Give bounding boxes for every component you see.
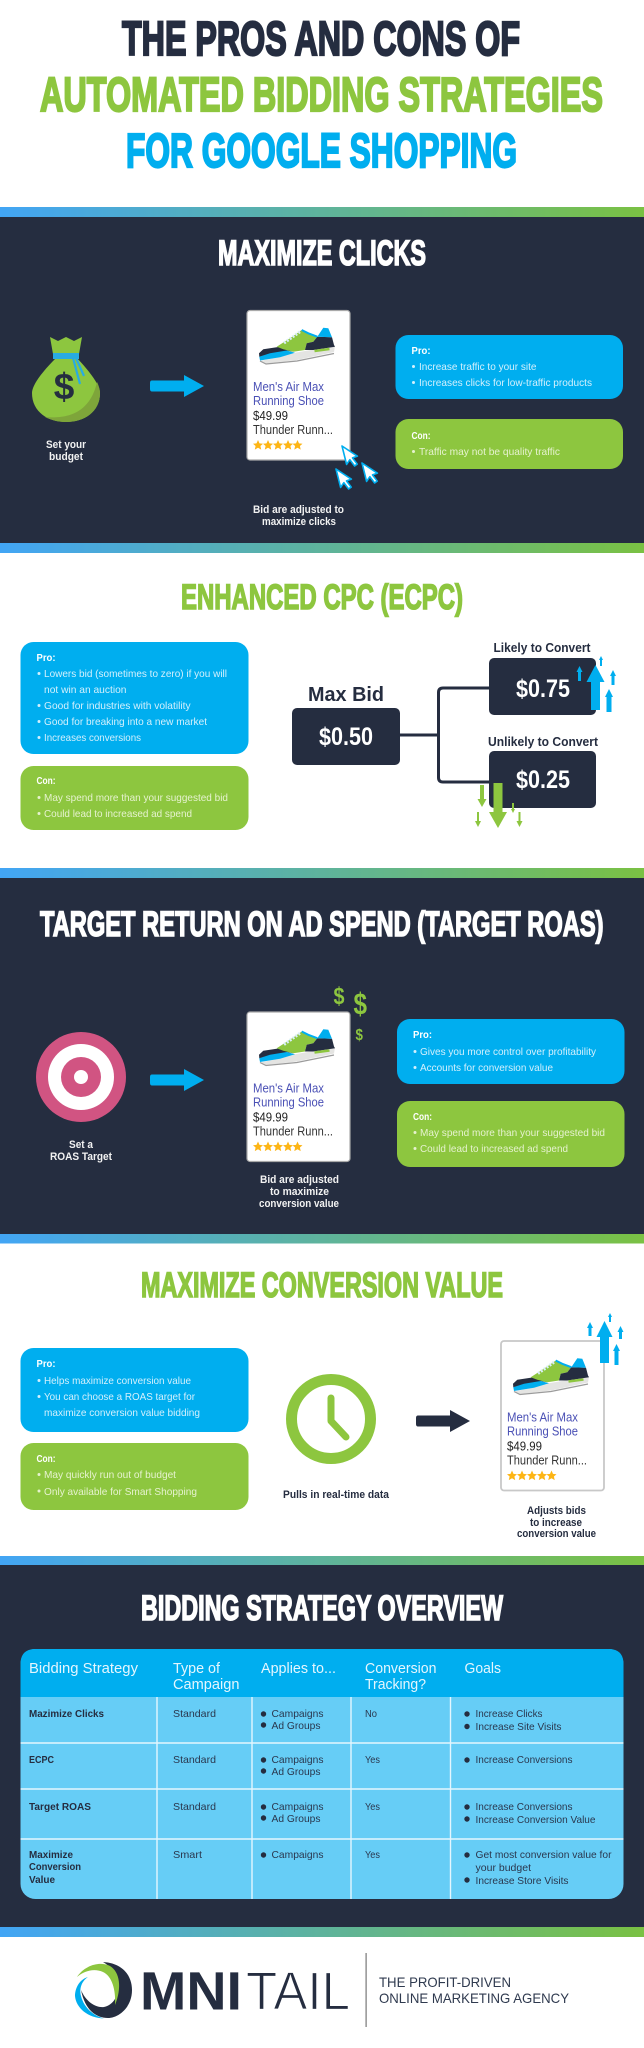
pro box: Pro: [412,345,430,357]
heading: maximize clicks: MAXIMIZE CLICKS [218,234,426,273]
product card: Men's Air Max [253,380,325,394]
caption: bids adjusted: conversion value [259,1198,339,1210]
table header: Campaign [173,1676,240,1693]
heading: enhanced cpc: ENHANCED CPC (ECPC) [181,578,463,617]
product card [247,310,350,460]
pro box: Helps maximize conversion value [44,1375,191,1387]
con box: Con: [36,775,56,787]
gradient band [0,543,644,553]
caption: adjusts bids: conversion value [517,1528,596,1540]
pro box [397,1019,624,1084]
pro box: Lowers bid (sometimes to zero) if you will [44,668,227,680]
row: maximize clicks: Increase Clicks [476,1708,542,1720]
wordmark [140,1962,350,2022]
row: maximize conversion value: your budget [476,1862,531,1874]
caption: set a roas target: ROAS Target [50,1151,112,1163]
con box: Traffic may not be quality traffic [419,446,560,458]
gradient band [0,207,644,217]
table header [29,1660,501,1693]
pro box: Gives you more control over profitability [420,1046,597,1058]
pro box: Good for breaking into a new market [44,716,207,728]
caption: bids adjusted [259,1174,339,1210]
caption: bids adjusted [253,504,344,528]
row: maximize conversion value: Smart [173,1849,202,1861]
row: ecpc: Increase Conversions [476,1754,572,1766]
row: target roas: Increase Conversions [476,1801,572,1813]
table header: Bidding Strategy [29,1660,138,1677]
box: unlikely value [489,751,596,808]
caption: bids adjusted: maximize clicks [262,516,336,528]
caption: set your budget [46,439,87,463]
panel: target roas [0,878,644,1234]
table [20,1649,624,1899]
caption: bids adjusted: to maximize [270,1186,329,1198]
row: ecpc: Standard [173,1754,216,1766]
row: maximize conversion value: Value [29,1874,55,1886]
row: maximize clicks: Increase Site Visits [476,1721,562,1733]
label: likely to convert: Likely to Convert [494,641,591,655]
box: likely value: $0.75 [516,675,570,703]
gradient band [0,1234,644,1244]
wordmark: TAIL [246,1962,350,2022]
wordmark: MNI [140,1962,242,2022]
row: ecpc: Yes [365,1754,380,1766]
box: unlikely value: $0.25 [516,766,570,794]
box: max bid value [292,708,400,765]
icon: up arrows [576,656,616,712]
product card: Men's Air Max [253,1082,325,1096]
gradient band [0,868,644,878]
row: maximize clicks: Ad Groups [272,1720,320,1732]
caption: pulls in real-time data: Pulls in real-time data [283,1489,390,1501]
pro box: Increases conversions [44,732,141,744]
icon: down arrows [475,783,522,828]
pro box: not win an auction [44,684,127,696]
pro box: Increases clicks for low-traffic products [419,377,592,389]
icon: dollar signs: $ [354,986,367,1021]
con box: May quickly run out of budget [44,1469,176,1481]
row: maximize conversion value: Yes [365,1849,380,1861]
row: maximize clicks [29,1708,562,1733]
icon: dollar signs: $ [334,983,345,1010]
panel: enhanced cpc [20,578,616,830]
pro box: Increase traffic to your site [419,361,537,373]
con box: May spend more than your suggested bid [420,1127,605,1139]
box: likely value [489,658,596,715]
con box: Con: [413,1111,432,1123]
icon: money bag: $ [54,366,75,407]
icon: up arrows [587,1313,624,1365]
product card [501,1341,604,1490]
logo: omnitail [75,1953,570,2027]
row: maximize clicks: Campaigns [272,1708,324,1720]
con box: Could lead to increased ad spend [44,808,192,820]
row: target roas [29,1801,596,1826]
con box: May spend more than your suggested bid [44,792,228,804]
row: maximize conversion value: Maximize [29,1849,73,1861]
label: unlikely to convert: Unlikely to Convert [488,735,599,749]
product card: Running Shoe [253,394,324,408]
table header: Goals [464,1660,501,1677]
caption: bids adjusted: Bid are adjusted [260,1174,339,1186]
caption: set a roas target [50,1139,112,1163]
con box: Con: [412,430,430,442]
icon: money bag [32,337,100,422]
icon: target [36,1032,126,1122]
caption: set your budget: budget [49,451,83,463]
caption: set a roas target: Set a [69,1139,94,1151]
caption: adjusts bids [517,1505,596,1540]
gradient band [0,1556,644,1566]
table header: Applies to... [261,1660,336,1677]
row: maximize conversion value: Increase Store Visits [476,1875,568,1887]
table header: Tracking? [365,1676,426,1693]
product card: Thunder Runn... [253,423,333,437]
caption: adjusts bids: Adjusts bids [527,1505,586,1517]
panel: bidding strategy overview [0,1565,644,1927]
panel: maximize clicks [0,217,644,543]
product card: $49.99 [253,408,288,423]
table header: Conversion [365,1660,436,1677]
label: max bid: Max Bid [308,684,384,706]
row: maximize conversion value: Campaigns [272,1849,324,1861]
arrow [416,1410,470,1432]
pro box: Pro: [36,1358,56,1370]
arrow [150,1069,204,1091]
con box [20,766,248,830]
con box: Con: [36,1453,56,1465]
con box [396,419,623,469]
row: ecpc: Campaigns [272,1754,324,1766]
row: target roas: Ad Groups [272,1813,320,1825]
row: maximize conversion value: Get most conversion value for [476,1849,612,1861]
product card: Thunder Runn... [507,1454,587,1468]
con box [397,1101,624,1167]
row: target roas: Standard [173,1801,216,1813]
row: maximize clicks: Mazimize Clicks [29,1708,104,1720]
row: maximize conversion value [29,1849,612,1887]
row: target roas: Increase Conversion Value [476,1814,596,1826]
caption: set your budget: Set your [46,439,87,451]
row: target roas: Yes [365,1801,380,1813]
pro box: Accounts for conversion value [420,1062,553,1074]
table header: Type of [173,1660,221,1677]
row: target roas: Target ROAS [29,1801,91,1813]
con box: Only available for Smart Shopping [44,1486,197,1498]
product card [247,1012,350,1162]
max bid diagram [292,641,616,828]
gradient band [0,1927,644,1937]
caption: adjusts bids: to increase [530,1517,582,1529]
tagline [379,1974,570,2006]
product card: Running Shoe [253,1096,324,1110]
product card: Men's Air Max [507,1410,579,1424]
con box: Could lead to increased ad spend [420,1143,568,1155]
product card: $49.99 [253,1110,288,1124]
caption: bids adjusted: Bid are adjusted to [253,504,344,516]
panel: maximize conversion value [20,1266,624,1540]
pro box: Pro: [413,1029,432,1041]
pro box: Good for industries with volatility [44,700,191,712]
pro box [396,335,623,399]
icon: dollar signs [334,983,367,1044]
row: maximize clicks: Standard [173,1708,216,1720]
arrow [150,375,204,397]
pro box [20,1348,248,1432]
pro box: You can choose a ROAS target for [44,1391,195,1403]
row: ecpc: ECPC [29,1754,54,1766]
row: maximize clicks: No [365,1708,377,1720]
icon: dollar signs: $ [356,1027,363,1044]
icon: click cursors [336,443,380,491]
icon: swirl mark [75,1962,132,2018]
row: ecpc: Ad Groups [272,1766,320,1778]
connector lines [400,688,490,782]
tagline: ONLINE MARKETING AGENCY [379,1990,570,2006]
pro box: maximize conversion value bidding [44,1407,200,1419]
box: max bid value: $0.50 [319,723,373,751]
icon: clock [292,1380,370,1458]
product card: Thunder Runn... [253,1124,333,1138]
title [40,13,603,178]
pro box [20,642,248,754]
tagline: THE PROFIT-DRIVEN [379,1974,511,1990]
con box [20,1443,248,1510]
product card: Running Shoe [507,1424,578,1438]
row: maximize conversion value: Conversion [29,1861,81,1873]
divider [366,1953,367,2027]
row: ecpc [29,1754,572,1778]
pro box: Pro: [36,652,56,664]
product card: $49.99 [507,1438,542,1454]
row: target roas: Campaigns [272,1801,324,1813]
